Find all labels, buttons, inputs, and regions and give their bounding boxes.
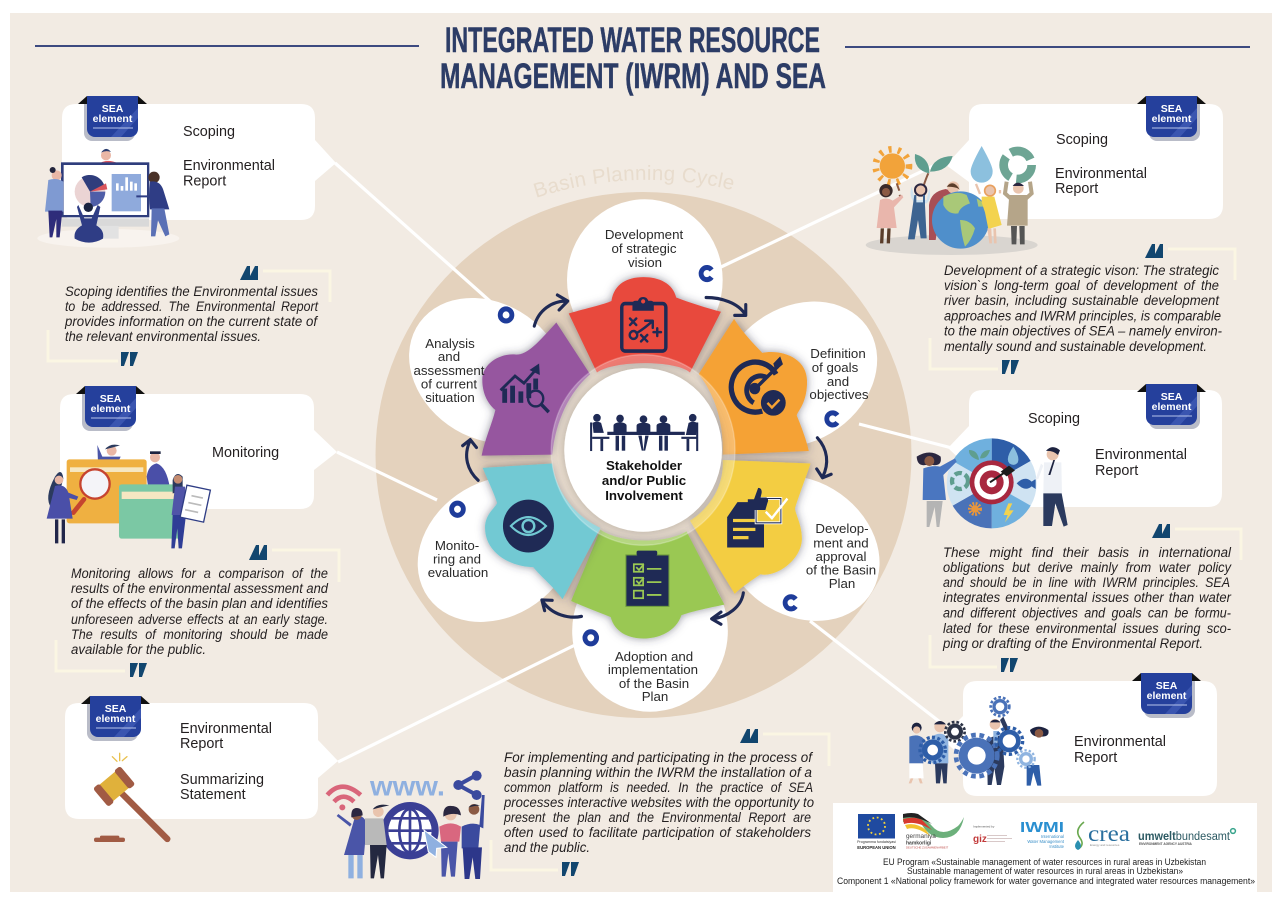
- logo: germaniya hamkorligi: hamkorligi: [906, 840, 932, 846]
- paragraph: obligations but derive mainly from water policy: [943, 560, 1232, 575]
- badge: SEA: [1156, 680, 1178, 692]
- logo: umweltbundesamt: umweltbundesamt: [1138, 831, 1231, 843]
- center halo: [551, 355, 735, 545]
- petal label: strategic vision: vision: [628, 255, 662, 270]
- arrow: plan to adoption: [712, 593, 743, 624]
- title: MANAGEMENT (IWRM) AND SEA: [440, 57, 826, 96]
- curved heading: Basin Planning Cycle: Basin Planning Cycle: [534, 165, 734, 198]
- paragraph: to be addressed. The Environmental Report: [65, 299, 319, 314]
- quote: scoping text: [48, 266, 330, 366]
- footer text: [837, 857, 1255, 886]
- petal label: analysis: Analysis: [425, 336, 475, 351]
- petal: goals (orange): [699, 319, 809, 455]
- petal: analysis (purple): [482, 322, 590, 456]
- callout: middle right: [917, 384, 1222, 528]
- logo: germaniya hamkorligi: DEUTSCHE ZUSAMMENARBEIT: [906, 846, 949, 850]
- icon: checklist: [626, 551, 669, 606]
- paragraph: These might find their basis in international: [943, 545, 1232, 560]
- paragraph: river basin, including sustainable development: [944, 293, 1220, 308]
- logo: IWMI: IWMI: [1020, 819, 1064, 836]
- badge: SEA: [102, 103, 124, 115]
- paragraph: and the public.: [504, 840, 590, 855]
- petal label: analysis: situation: [425, 390, 475, 405]
- text: Environmental: [180, 721, 272, 737]
- quote: strategic vision text: [930, 244, 1235, 374]
- callout: bottom right: [909, 673, 1217, 796]
- callout: bottom left: [65, 696, 338, 842]
- arrow: monitoring to analysis: [463, 440, 478, 480]
- logo: germaniya hamkorligi: germaniya: [906, 833, 936, 840]
- illustration: www and people: www.: [369, 770, 445, 801]
- quote: platform text: [491, 729, 829, 876]
- paragraph: results of the environmental assessment and: [71, 581, 328, 596]
- petal label: basin plan: approval: [815, 549, 867, 564]
- logo: IWMI: [1020, 819, 1065, 849]
- petal label: adoption: Adoption and: [615, 649, 693, 664]
- paragraph: basin planning within the IWRM the installation of a: [504, 765, 812, 780]
- text: Scoping: [1056, 132, 1108, 148]
- badge: SEA: [1161, 103, 1183, 115]
- title: [35, 21, 1250, 96]
- text: Environmental: [1095, 447, 1187, 463]
- text: Environmental: [183, 158, 275, 174]
- logo: EU flag: Programma fundatsiyasi: [857, 840, 896, 844]
- footer logo panel: [833, 803, 1257, 892]
- center label: Involvement: [605, 488, 683, 503]
- icon: document with thumbs up: [727, 488, 787, 547]
- illustration: www and people: [327, 770, 485, 879]
- paragraph: unforeseen adverse effects at an early stage.: [71, 612, 328, 627]
- paragraph: [64, 284, 319, 344]
- cycle diagram: [383, 199, 905, 712]
- petal label: basin plan: ment and: [813, 536, 869, 550]
- petal label: strategic vision: of strategic: [611, 241, 677, 256]
- petal label: adoption: of the Basin: [619, 676, 689, 691]
- petal label: goals: Definition: [810, 346, 866, 361]
- paragraph: [944, 263, 1222, 354]
- icon: clipboard strategy: [622, 297, 666, 351]
- callout: middle left: [47, 386, 337, 548]
- paragraph: For implementing and participating in the process of: [504, 750, 813, 765]
- paragraph: lated for these environmental issues during sco-: [943, 621, 1231, 636]
- text: Report: [180, 736, 223, 752]
- center label: and/or Public: [602, 473, 686, 488]
- text: Report: [1074, 750, 1117, 766]
- ring markers: [452, 267, 837, 644]
- connector lines: [335, 158, 952, 762]
- arrow: analysis to vision: [534, 295, 568, 326]
- paragraph: vision`s long-term goal of development of the: [944, 278, 1219, 293]
- illustration: people with gears: [909, 697, 1049, 786]
- petal label: analysis: assessment: [414, 363, 485, 378]
- badge: [1137, 96, 1206, 141]
- petal label: adoption: implementation: [608, 662, 698, 677]
- logo: umweltbundesamt: [1138, 829, 1235, 846]
- illustration: dashboard team: [37, 149, 179, 248]
- petal label: goals: objectives: [809, 387, 869, 402]
- quote: monitoring text: [56, 545, 339, 677]
- badge: SEA: [1161, 391, 1183, 403]
- badge: element: [93, 113, 133, 125]
- petal: strategic vision (red): [569, 277, 721, 372]
- paragraph: [71, 566, 328, 657]
- petal label: adoption: Plan: [642, 689, 668, 704]
- badge: [78, 96, 147, 141]
- text: Report: [183, 174, 226, 190]
- logo: crea: [1075, 821, 1130, 850]
- paragraph: approaches and IWRM principles, is comparable: [944, 308, 1221, 324]
- footer text: EU Program «Sustainable management of water resources in rural areas in Uzbekistan: [883, 857, 1206, 867]
- paragraph: often used to facilitate participation of stakeholders: [504, 825, 811, 840]
- paragraph: common platform is needed. In the practice of SEA: [504, 780, 813, 795]
- badge: SEA: [105, 703, 127, 715]
- icon: meeting table: [590, 414, 698, 451]
- basin planning cycle ring: [376, 192, 912, 718]
- icon: eye: [503, 500, 554, 552]
- text: Report: [1055, 181, 1098, 197]
- logo: crea: crea: [1088, 821, 1130, 846]
- illustration: gavel: [93, 753, 167, 842]
- text: Monitoring: [212, 445, 279, 461]
- paragraph: and should be in line with IWRM principles. SEA: [943, 575, 1230, 590]
- logo: giz: [973, 824, 1012, 845]
- logo: IWMI: International: [1041, 834, 1064, 839]
- white label blobs: [383, 199, 905, 712]
- text: Summarizing: [180, 772, 264, 788]
- paragraph: [942, 545, 1232, 651]
- title: INTEGRATED WATER RESOURCE: [445, 21, 820, 60]
- paragraph: and different objectives and goals can be formu-: [943, 606, 1231, 620]
- paragraph: provides information on the current state of: [64, 314, 318, 329]
- text: Scoping: [1028, 411, 1080, 427]
- paragraph: the relevant environmental issues.: [65, 329, 261, 344]
- petal label: basin plan: of the Basin: [806, 562, 876, 578]
- logo: IWMI: Institute: [1049, 844, 1065, 849]
- text: Report: [1095, 463, 1138, 479]
- petal label: basin plan: Develop-: [815, 521, 869, 536]
- paragraph: ping or drafting of the Environmental Report.: [942, 636, 1203, 651]
- paragraph: Scoping identifies the Environmental issues: [65, 284, 318, 299]
- badge: element: [1152, 113, 1192, 125]
- text: Environmental: [1074, 734, 1166, 750]
- logo: crea: Energy and resources: [1090, 843, 1120, 847]
- paragraph: [503, 750, 814, 855]
- logo: IWMI: Water Management: [1027, 839, 1065, 844]
- paragraph: of the effects of the basin plan and identifies: [71, 596, 328, 611]
- arrow: vision to goals: [706, 297, 746, 315]
- illustration: people and globe: [866, 146, 1038, 255]
- paragraph: Development of a strategic vison: The strategic: [944, 263, 1219, 278]
- badge: [76, 386, 145, 431]
- petal label: goals: and: [827, 374, 849, 389]
- center white circle: [564, 368, 722, 532]
- badge: element: [1152, 401, 1192, 413]
- paragraph: to the main objectives of SEA – namely environ-: [944, 324, 1222, 338]
- badge: [81, 696, 150, 741]
- badge: SEA: [100, 393, 122, 405]
- center label: Stakeholder: [606, 458, 682, 473]
- paragraph: processes interactive websites with the opportunity to: [503, 795, 814, 810]
- logo: giz: giz: [973, 834, 987, 845]
- petal label: strategic vision: Development: [605, 227, 683, 242]
- petal label: monitoring: evaluation: [428, 565, 488, 580]
- badge: element: [91, 403, 131, 415]
- callout: top right: [866, 96, 1223, 255]
- petal label: analysis: of current: [421, 376, 477, 392]
- illustration: folders and magnifier: [47, 445, 210, 548]
- paragraph: integrates environmental issues other than water: [943, 590, 1231, 605]
- logo: germaniya hamkorligi: [903, 813, 964, 850]
- icon: target: [731, 356, 786, 416]
- icon: chart with magnifier: [501, 364, 549, 412]
- quote: goals text: [930, 524, 1241, 672]
- arrow: adoption to monitoring: [542, 600, 581, 617]
- petal: basin plan (yellow): [690, 460, 810, 594]
- logo: umweltbundesamt: ENVIRONMENT AGENCY AUSTRIA: [1139, 842, 1193, 846]
- badge: element: [96, 713, 136, 725]
- logo: EU flag: EUROPEAN UNION: [857, 845, 896, 850]
- paragraph: Monitoring allows for a comparison of the: [71, 566, 328, 581]
- paragraph: mentally sound and sustainable development.: [944, 339, 1207, 354]
- footer text: Sustainable management of water resources in rural areas in Uzbekistan»: [907, 866, 1183, 876]
- callout: top left: [37, 96, 336, 248]
- petal: adoption (green): [571, 530, 724, 639]
- petal label: monitoring: ring and: [433, 552, 481, 566]
- paragraph: The results of monitoring should be made: [71, 627, 328, 642]
- text: Scoping: [183, 124, 235, 140]
- petal label: analysis: and: [438, 349, 460, 364]
- petal: monitoring (teal): [483, 464, 600, 599]
- badge: [1137, 384, 1206, 429]
- illustration: puzzle target: [917, 438, 1068, 528]
- paragraph: available for the public.: [71, 642, 206, 657]
- badge: element: [1147, 690, 1187, 702]
- logo: giz: Implemented by: [973, 824, 995, 828]
- petal label: basin plan: Plan: [829, 576, 855, 591]
- text: Environmental: [1055, 166, 1147, 182]
- text: Statement: [180, 787, 246, 803]
- petal label: monitoring: Monito-: [435, 538, 479, 553]
- logo: EU flag: [857, 814, 896, 850]
- badge: [1132, 673, 1201, 718]
- footer text: Component 1 «National policy framework for water governance and integrated water resources management»: [837, 876, 1255, 886]
- paragraph: present the plan and the Environmental Report are: [503, 810, 811, 825]
- petal label: goals: of goals: [812, 360, 859, 375]
- arrow: goals to plan: [817, 438, 831, 478]
